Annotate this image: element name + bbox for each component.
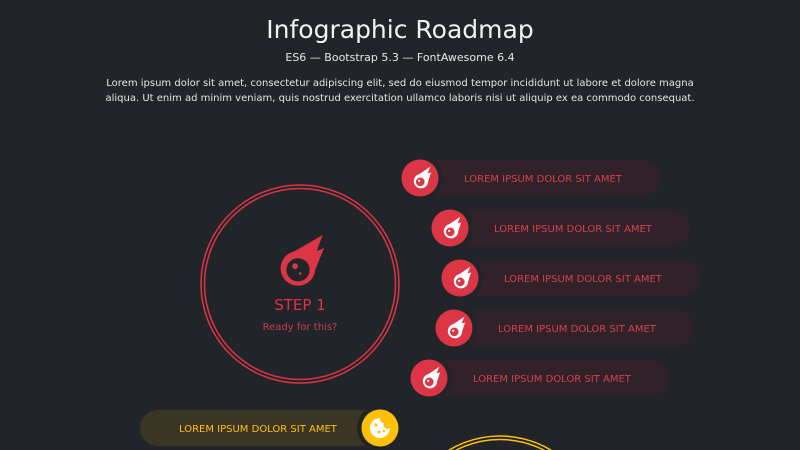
icon: cookie: [370, 418, 390, 438]
pill 5: [406, 355, 669, 401]
pill 4: LOREM IPSUM DOLOR SIT AMET: [498, 324, 657, 335]
pill 5: LOREM IPSUM DOLOR SIT AMET: [473, 374, 632, 385]
pill yellow: LOREM IPSUM DOLOR SIT AMET: [179, 424, 338, 435]
heading: step 1: STEP 1: [274, 296, 326, 314]
icon: comet large: [281, 235, 324, 286]
intro text: Lorem ipsum dolor sit amet, consectetur adipiscing elit, sed do eiusmod tempor incididunt ut labore et dolore magna: [106, 78, 694, 89]
panel: step 1 circle: [201, 185, 399, 383]
pill 3: LOREM IPSUM DOLOR SIT AMET: [504, 274, 663, 285]
panel: step 2 circle (partial): [401, 436, 599, 450]
pill 1: [397, 155, 660, 201]
pill 4: [431, 305, 694, 351]
pill 2: [427, 205, 690, 251]
pill 2: LOREM IPSUM DOLOR SIT AMET: [494, 224, 653, 235]
title: Infographic Roadmap: [266, 15, 534, 44]
pill yellow: [140, 405, 403, 450]
subtitle: ES6 — Bootstrap 5.3 — FontAwesome 6.4: [285, 51, 515, 64]
pill 3: [437, 255, 700, 301]
pill 1: LOREM IPSUM DOLOR SIT AMET: [464, 174, 623, 185]
intro text: aliqua. Ut enim ad minim veniam, quis nostrud exercitation ullamco laboris nisi ut aliquip ex ea commodo consequat.: [105, 93, 695, 104]
text: ready: Ready for this?: [263, 322, 337, 333]
intro text: [105, 78, 695, 104]
